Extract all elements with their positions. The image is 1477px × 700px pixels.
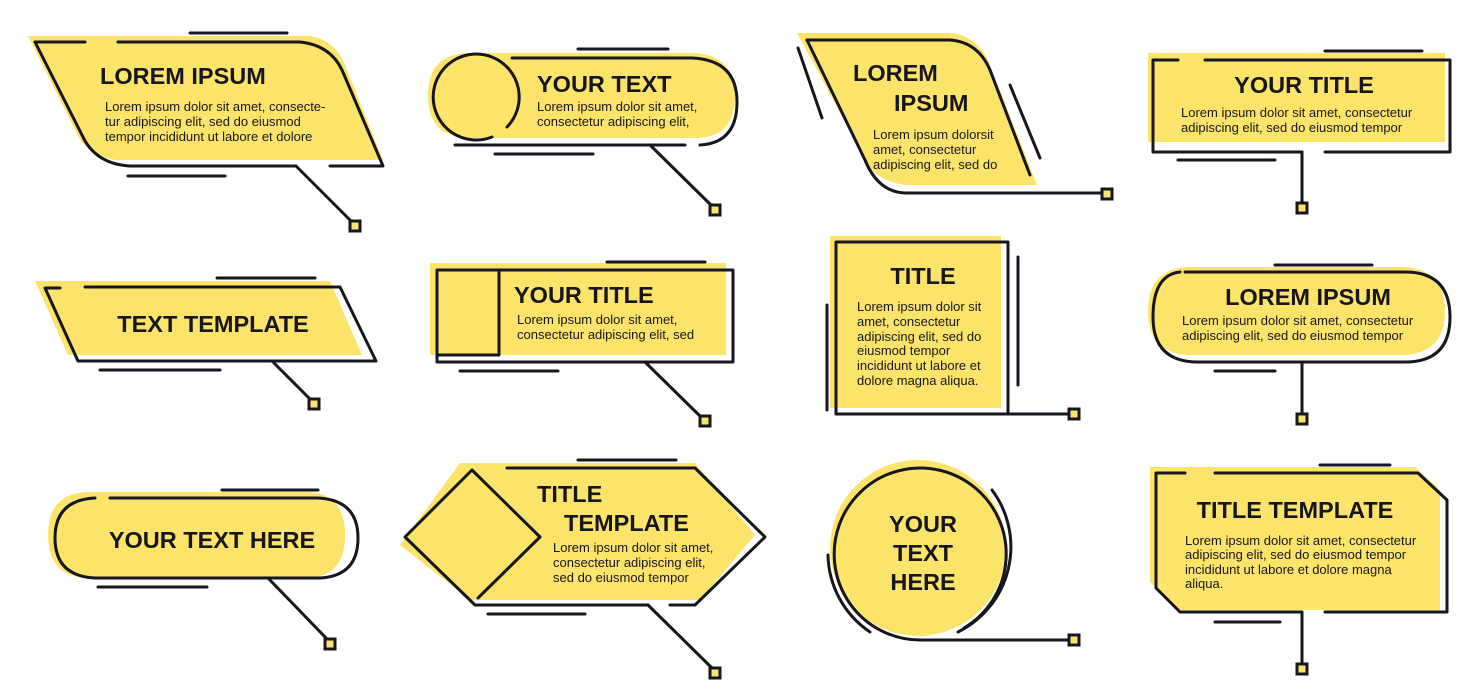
panel: your text here pill: YOUR TEXT HERE — [109, 527, 315, 553]
panel: title template chamfered: aliqua. — [1185, 576, 1223, 591]
panel: title template chamfered: Lorem ipsum dolor sit amet, consectetur — [1185, 533, 1417, 548]
panel: circle your text here: YOUR — [889, 511, 957, 537]
panel: your title with square: Lorem ipsum dolor sit amet, — [517, 312, 677, 327]
panel: text template: TEXT TEMPLATE — [117, 311, 309, 337]
panel: lorem ipsum pill — [1148, 265, 1450, 424]
panel: title square: dolore magna aliqua. — [857, 373, 978, 388]
panel: your text pill: Lorem ipsum dolor sit amet, — [537, 99, 697, 114]
panel: title template hexagon: consectetur adipiscing elit, — [553, 555, 705, 570]
panel: your text pill: consectetur adipiscing elit, — [537, 114, 689, 129]
leader — [296, 166, 352, 222]
panel: lorem ipsum diagonal: amet, consectetur — [873, 142, 977, 157]
panel: circle your text here: TEXT — [893, 540, 954, 566]
title: LOREM IPSUM — [100, 63, 266, 89]
body text: Lorem ipsum dolor sit amet, consecte- — [105, 99, 325, 114]
panel: your text here pill — [48, 490, 358, 649]
panel: title template chamfered — [1150, 465, 1447, 674]
panel: lorem ipsum pill: LOREM IPSUM — [1225, 284, 1391, 310]
panel: title square: amet, consectetur — [857, 314, 961, 329]
panel: title template hexagon: sed do eiusmod tempor — [553, 570, 690, 585]
panel: lorem ipsum diagonal: Lorem ipsum dolorsit — [873, 127, 994, 142]
panel: title template hexagon: TEMPLATE — [564, 510, 689, 536]
panel: title square — [827, 236, 1079, 419]
panel: title template chamfered: TITLE TEMPLATE — [1197, 497, 1393, 523]
panel: lorem ipsum slanted: tur adipiscing elit, sed do eiusmod — [105, 114, 301, 129]
panel: lorem ipsum slanted: tempor incididunt ut labore et dolore — [105, 129, 312, 144]
panel: title square: TITLE — [890, 263, 956, 289]
panel: your text pill — [428, 49, 737, 215]
panel: lorem ipsum pill: adipiscing elit, sed do eiusmod tempor — [1182, 328, 1404, 343]
panel: title square: incididunt ut labore et — [857, 358, 981, 373]
panel: circle your text here: HERE — [890, 569, 956, 595]
panel: title template hexagon — [400, 460, 765, 678]
leader — [650, 145, 712, 206]
panel: your text pill: YOUR TEXT — [537, 71, 672, 97]
panel: lorem ipsum pill: Lorem ipsum dolor sit amet, consectetur — [1182, 313, 1414, 328]
panel: title square: adipiscing elit, sed do — [857, 329, 981, 344]
panel: lorem ipsum diagonal — [797, 33, 1112, 199]
panel: your title rect — [1148, 51, 1450, 213]
panel: lorem ipsum diagonal: LOREM — [853, 60, 938, 86]
panel: text template — [35, 278, 376, 409]
panel: title template chamfered: incididunt ut labore et dolore magna — [1185, 562, 1392, 577]
panel: title square: Lorem ipsum dolor sit — [857, 299, 982, 314]
panel: title square: eiusmod tempor — [857, 343, 951, 358]
panel: your title rect: YOUR TITLE — [1234, 72, 1374, 98]
panel: title template chamfered: adipiscing elit, sed do eiusmod tempor — [1185, 547, 1407, 562]
panel: your title rect: Lorem ipsum dolor sit amet, consectetur — [1181, 105, 1413, 120]
panel: your title with square — [430, 262, 733, 426]
panel: lorem ipsum diagonal: adipiscing elit, sed do — [873, 157, 997, 172]
panel: circle your text here — [828, 460, 1079, 645]
panel: title template hexagon: TITLE — [537, 481, 602, 507]
panel: lorem ipsum diagonal: IPSUM — [894, 90, 968, 116]
panel: your title with square: YOUR TITLE — [514, 282, 654, 308]
panel: title template hexagon: Lorem ipsum dolor sit amet, — [553, 540, 713, 555]
panel: your title with square: consectetur adipiscing elit, sed — [517, 327, 694, 342]
panel: your title rect: adipiscing elit, sed do eiusmod tempor — [1181, 120, 1403, 135]
panel: lorem ipsum slanted — [28, 33, 383, 231]
